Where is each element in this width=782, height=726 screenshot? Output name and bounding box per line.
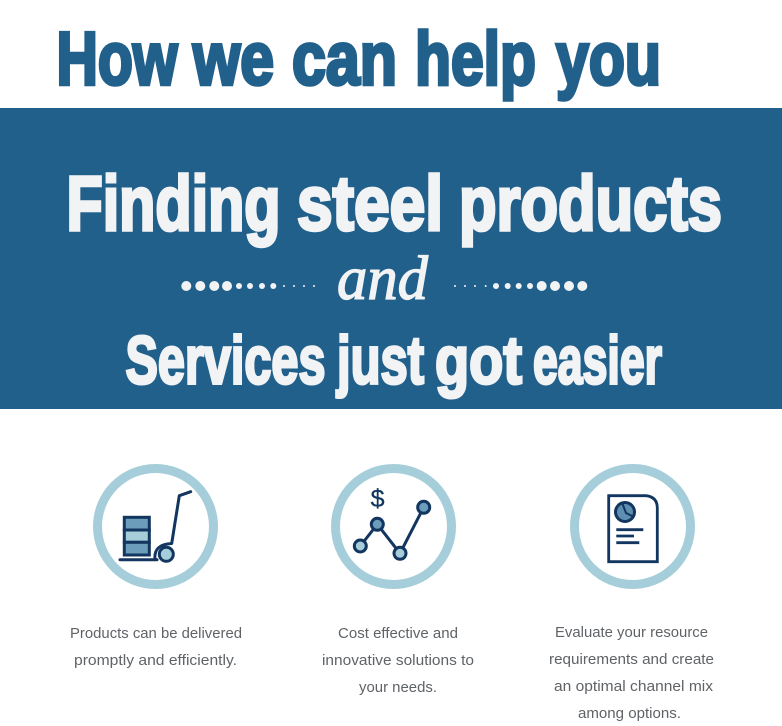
heading: finding steel products: steel xyxy=(297,161,443,247)
title: you xyxy=(556,16,661,100)
title: help xyxy=(415,16,536,100)
text: resources caption: requirements and create xyxy=(549,651,714,668)
icon: report document xyxy=(574,468,690,584)
text: cost caption xyxy=(322,625,474,696)
heading: finding steel products: Finding xyxy=(66,161,280,247)
icon: cost line chart xyxy=(336,468,452,584)
title: we xyxy=(192,16,274,100)
heading: finding steel products xyxy=(66,161,722,247)
divider: left dots xyxy=(181,281,315,291)
panel: headline banner xyxy=(0,108,782,409)
text: resources caption: an optimal channel mix xyxy=(554,678,714,695)
icon: hand truck with barrels xyxy=(98,468,214,584)
icon: cost line chart: $ xyxy=(371,485,385,513)
script word: and: and xyxy=(337,245,429,313)
text: resources caption: among options. xyxy=(578,705,681,722)
heading: services just got easier: easier xyxy=(533,322,662,398)
text: delivery caption xyxy=(70,625,242,669)
heading: finding steel products: products xyxy=(459,161,722,247)
title xyxy=(56,16,661,100)
text: cost caption: your needs. xyxy=(359,679,437,696)
text: resources caption: Evaluate your resource xyxy=(555,624,708,641)
heading: services just got easier: got xyxy=(435,322,522,398)
text: delivery caption: promptly and efficiently. xyxy=(74,652,237,669)
text: resources caption xyxy=(549,624,714,722)
divider: right dots xyxy=(454,281,587,291)
text: cost caption: Cost effective and xyxy=(338,625,458,642)
heading: services just got easier: Services xyxy=(126,322,326,398)
heading: services just got easier xyxy=(126,322,662,398)
text: delivery caption: Products can be delivered xyxy=(70,625,242,642)
text: cost caption: innovative solutions to xyxy=(322,652,474,669)
title: can xyxy=(292,16,397,100)
title: How xyxy=(56,16,178,100)
heading: services just got easier: just xyxy=(336,322,424,398)
